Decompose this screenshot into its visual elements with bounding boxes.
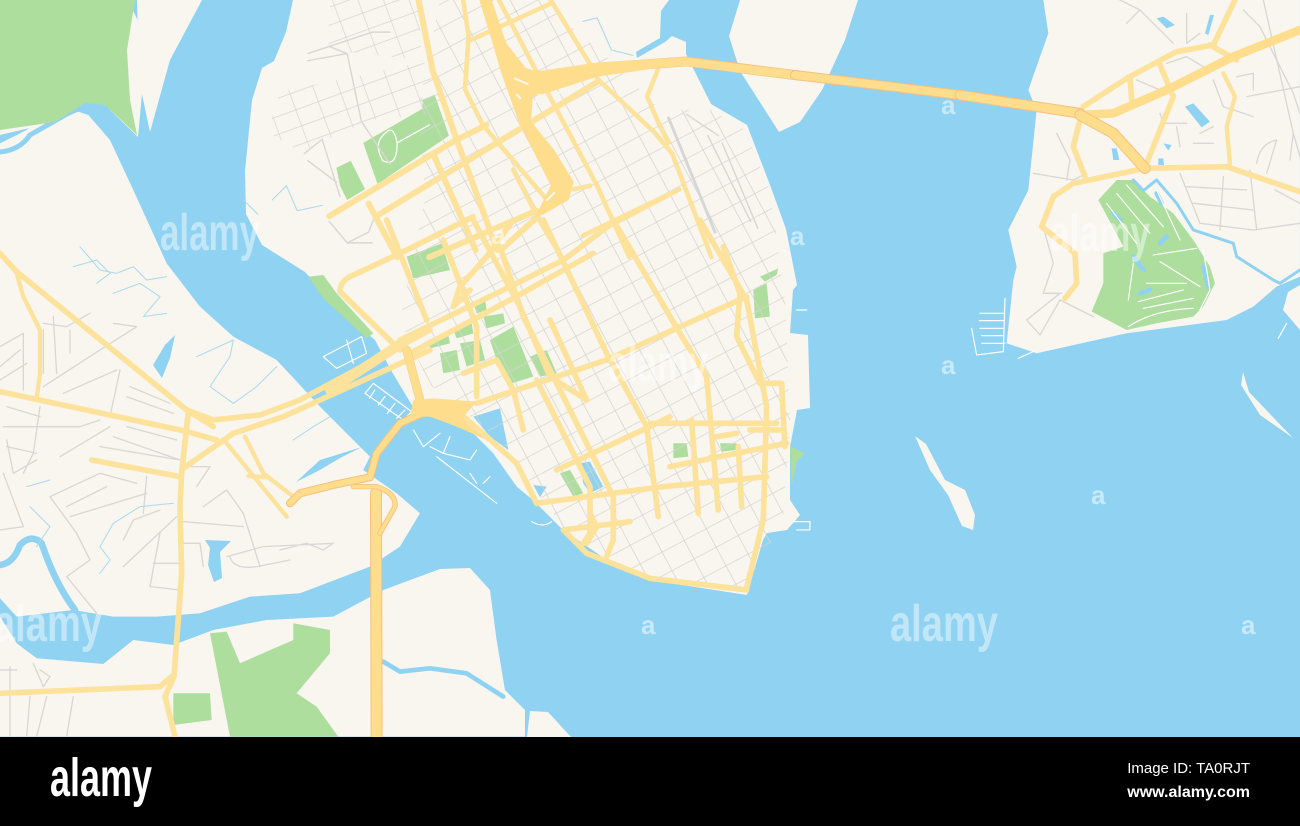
streets: rail yard [669,114,758,232]
park: golf course [1092,180,1300,330]
park: top-left [0,0,137,135]
footer: image id: Image ID: TA0RJT [1127,760,1250,777]
land: thin sandbar [1241,372,1293,438]
watermark: small a marks: a [1241,610,1256,640]
watermark: small a marks: a [491,220,506,250]
roads: downtown [330,217,787,590]
marina: city [365,383,497,503]
ramp gaps [515,79,576,200]
lake: colonial [580,462,603,493]
watermark: alamy east: alamy [1050,205,1150,263]
streets: north neighbourhood [328,0,422,60]
watermark: alamy harbor: alamy [890,595,998,653]
park: hampton [363,95,449,184]
lagoon: west [296,447,362,482]
pond: west [153,335,175,378]
watermark: small a marks: a [641,610,656,640]
bridge: Ravenel [795,75,1080,113]
park: south tract [173,623,338,737]
park: riverside strip [308,275,373,338]
ponds: east bank [1112,15,1214,165]
land: small south point [527,711,571,737]
river: northwest stream [0,106,108,152]
lake: harbor basin [473,408,508,450]
land: top-left north shore [0,0,147,137]
streets: downtown grid [400,0,790,590]
land: small east islet [1283,285,1300,330]
land: harbor island [915,436,975,530]
streets: east bank [1027,0,1300,335]
marinas [323,250,1287,530]
watermark: small a marks: a [1091,480,1106,510]
footer: website: www.alamy.com [1126,784,1250,801]
land: downtown peninsula [245,0,810,595]
footer bar [0,737,1300,826]
roads: east bank [960,0,1300,298]
watermark: small a marks: a [790,221,805,251]
marina: south battery [532,250,810,530]
roads: north [329,0,800,257]
notch: tidal [533,485,547,497]
watermarks [0,90,1256,653]
streets: west neighbourhoods [0,247,333,737]
land: east bank [1007,0,1300,353]
pond: south [205,540,231,582]
roads: west [0,253,430,737]
watermark: alamy west river: alamy [160,204,259,262]
river: south channel [383,662,503,697]
watermark: small a marks [491,90,1256,640]
watermark: alamy downtown: alamy [608,335,708,393]
land: south bank [0,568,525,737]
river: west creek [0,539,75,610]
land: west bank [0,105,420,617]
streets: western peninsula marsh [244,18,633,243]
land: northern spit [137,0,202,132]
watermark: small a marks: a [941,90,956,120]
watermark: small a marks: a [941,350,956,380]
parks: downtown [407,243,805,497]
marina: west [323,337,367,368]
rivers and lakes [0,106,603,697]
streets: northwest neighbourhood [268,62,440,152]
footer: alamy logo: alamy [50,748,152,808]
marina: east [972,298,1287,358]
park: oval [336,161,365,200]
land: northern island [729,0,858,132]
